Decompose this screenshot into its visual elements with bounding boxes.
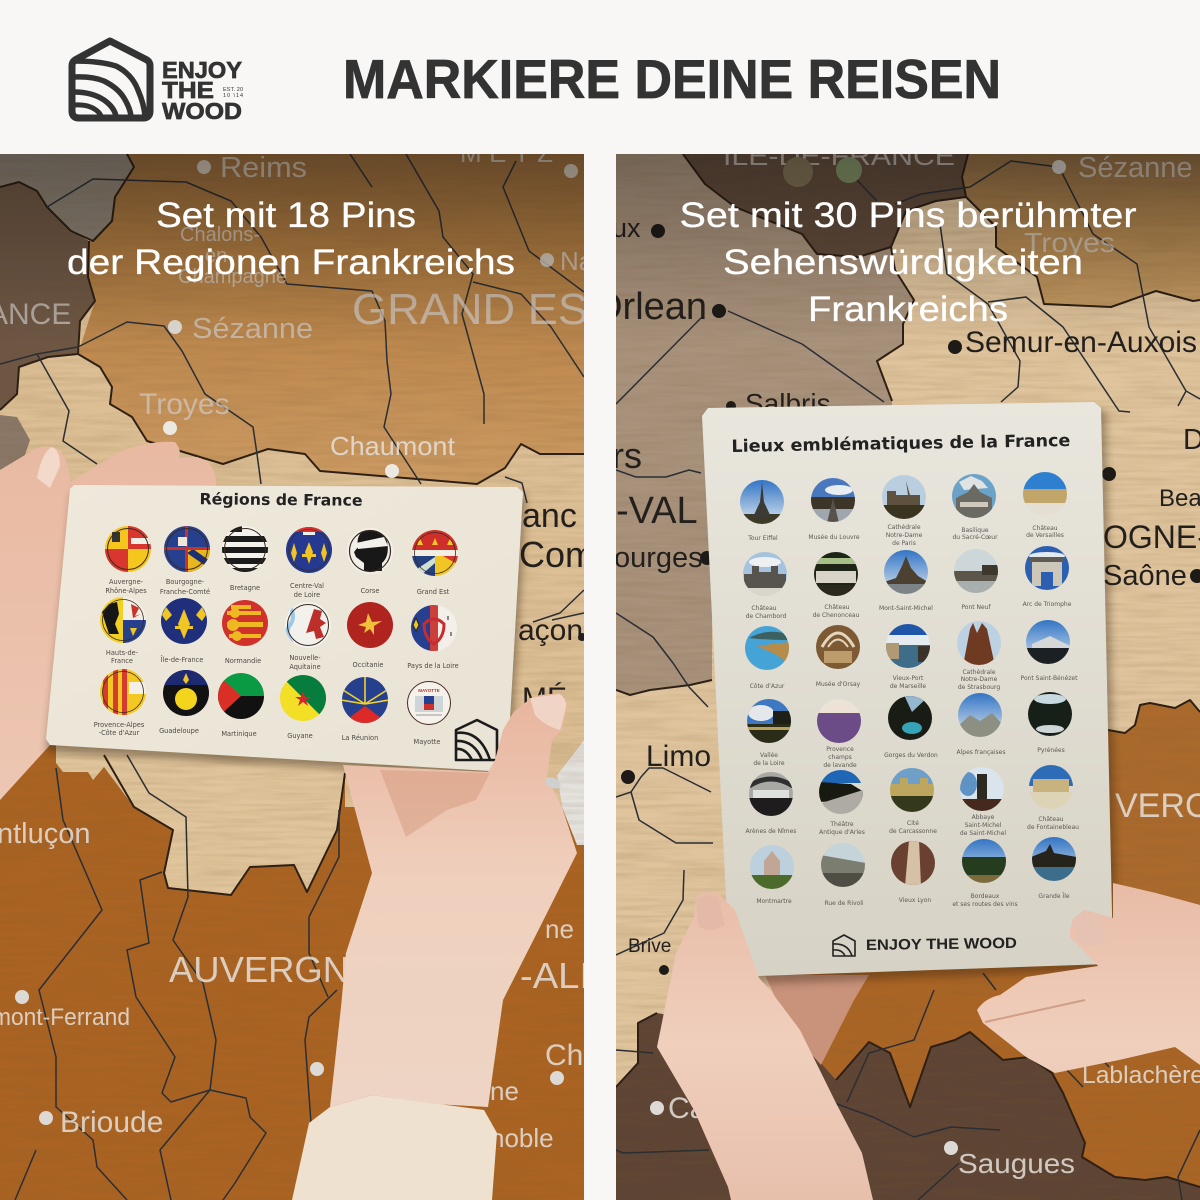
landmark labels: de Chambord [746, 613, 786, 620]
pin: Côte d'Azur [744, 625, 790, 671]
landmark labels: du Sacré-Cœur [952, 534, 998, 541]
map labels: ux [612, 213, 641, 243]
pin: Château de Fontainebleau [1028, 764, 1074, 810]
pin: Auvergne-Rhône-Alpes [105, 526, 151, 572]
map labels: ne [490, 1076, 519, 1106]
region labels: Grand Est [417, 588, 450, 596]
map labels: Troyes [139, 388, 230, 421]
landmark labels: Bordeaux [971, 893, 1000, 900]
map labels: Na [560, 246, 594, 276]
map labels: rs [612, 435, 642, 476]
region labels: Bretagne [230, 584, 260, 592]
landmark pins [739, 471, 1077, 890]
region labels: La Réunion [342, 734, 378, 742]
map labels: Ch [545, 1039, 583, 1072]
region labels: de Loire [294, 591, 320, 599]
pin: Normandie [221, 599, 269, 647]
map labels: Reims [220, 152, 307, 184]
wordmark [162, 57, 243, 124]
pin: Musée d'Orsay [815, 624, 861, 670]
subtitle: landmarks set: Frankreichs [808, 290, 1008, 329]
panel: landmarks set [593, 140, 1200, 1200]
card logo and brand [833, 935, 1017, 956]
landmark labels: Château [1038, 816, 1064, 823]
card: Régions de France [46, 485, 523, 772]
pin: La Réunion [341, 676, 389, 724]
region labels: -Côte d'Azur [99, 729, 140, 737]
panel: regions set [0, 138, 595, 1200]
map labels: -ALI [520, 955, 590, 996]
landmark labels: Provence [826, 746, 854, 753]
landmark labels: Pyrénées [1037, 747, 1065, 754]
pin: Gorges du Verdon [887, 695, 933, 741]
top shading [0, 154, 584, 344]
map labels: açon [518, 614, 583, 647]
landmark labels: Saint-Michel [965, 822, 1002, 829]
pin: Guadeloupe [162, 669, 210, 717]
pin: Provence-Alpes-Côte d'Azur [99, 668, 147, 716]
region labels: Nouvelle- [289, 654, 321, 662]
pin: Mayotte: MAYOTTE [418, 688, 440, 693]
landmark labels: Mont-Saint-Michel [879, 605, 933, 612]
map labels: Brioude [60, 1106, 163, 1139]
pin: Cathédrale Notre-Dame de Paris [881, 474, 927, 520]
hand holding card from left [0, 442, 216, 800]
map labels: noble [490, 1123, 554, 1153]
region labels: Hauts-de- [106, 649, 139, 657]
map labels: Sézanne [1078, 152, 1192, 184]
pin: Mont-Saint-Michel [883, 549, 929, 595]
pin: Abbaye Saint-Michel de Saint-Michel [959, 766, 1005, 812]
title: MARKIERE DEINE REISEN [343, 48, 1001, 110]
map labels [593, 140, 1200, 1179]
pin: Grand Est [411, 529, 459, 577]
pin: Théâtre Antique d'Arles [818, 769, 864, 815]
map labels: Brive [628, 936, 671, 957]
region labels: Normandie [225, 657, 261, 665]
map labels: Champagne [178, 266, 287, 288]
pin: Pont Neuf [953, 548, 999, 594]
region labels: Provence-Alpes [94, 721, 145, 729]
wordmark: WOOD [162, 98, 242, 124]
landmark labels: de Versailles [1026, 532, 1064, 539]
map labels: Ca [668, 1092, 707, 1125]
landmark labels: Alpes françaises [957, 749, 1005, 756]
landmark labels: Notre-Dame [961, 676, 998, 683]
pin: Provence champs de lavande [816, 698, 862, 744]
subtitle: landmarks set: Sehenswürdigkeiten [723, 243, 1083, 282]
map labels: Lablachère [1082, 1062, 1200, 1089]
subtitle: landmarks set [680, 196, 1137, 329]
card title: Régions de France [199, 490, 363, 510]
wordmark: EST. 20 [223, 87, 243, 93]
region labels: Rhône-Alpes [105, 587, 147, 595]
map labels: Sézanne [192, 313, 313, 345]
landmark labels: de Saint-Michel [960, 830, 1006, 837]
region labels: Franche-Comté [160, 588, 210, 596]
map labels: GRAND ES [352, 285, 588, 334]
subtitle: regions set [67, 196, 515, 282]
region labels: Auvergne- [109, 578, 144, 586]
landmark labels: Tour Eiffel [747, 535, 778, 542]
region labels: France [111, 657, 133, 665]
region labels: Centre-Val [290, 582, 324, 590]
pin: Arc de Triomphe [1024, 545, 1070, 591]
region labels: Corse [361, 587, 379, 595]
map labels: Chalons- [180, 224, 260, 246]
pin: Alpes françaises [957, 692, 1003, 738]
landmark labels: Abbaye [972, 814, 995, 821]
map labels: Troyes [1024, 227, 1115, 258]
landmark labels: de Marseille [890, 683, 926, 690]
map labels: en- [205, 245, 234, 267]
landmark labels: Côte d'Azur [750, 683, 785, 690]
landmark labels: Pont Neuf [961, 604, 992, 611]
pin: Île-de-France [160, 597, 208, 645]
region labels: Île-de-France [161, 655, 203, 664]
landmark labels: de Paris [892, 540, 916, 547]
landmark labels: Grande Île [1038, 893, 1070, 900]
pin: Guyane [279, 674, 327, 722]
subtitle: regions set: der Regionen Frankreichs [67, 243, 515, 282]
map background: wood regions [0, 154, 584, 1200]
pin: Martinique [217, 672, 265, 720]
landmark labels: Cathédrale [962, 669, 996, 676]
map labels [0, 138, 595, 1153]
landmark labels: de Chenonceau [813, 612, 860, 619]
map labels: AUVERGN [169, 949, 349, 990]
hand holding card, lower right [977, 883, 1200, 1073]
region labels [94, 578, 459, 746]
pin: Grande Île [1031, 836, 1077, 882]
landmark labels: Vieux Lyon [899, 897, 931, 904]
pin: Cité de Carcassonne [889, 767, 935, 813]
pin: Pyrénées [1027, 691, 1073, 737]
pin: Montmartre [749, 844, 795, 890]
pin: Arènes de Nîmes [748, 771, 794, 817]
pin: Château de Chenonceau [813, 551, 859, 597]
region labels: Occitanie [353, 661, 383, 669]
map labels: MÉ [522, 682, 567, 715]
landmark labels: Arc de Triomphe [1023, 601, 1072, 608]
pin: Bretagne [222, 526, 268, 573]
landmark labels: Château [1032, 525, 1058, 532]
landmark labels [746, 524, 1079, 908]
logo: Enjoy the Wood [72, 41, 243, 124]
landmark labels: Rue de Rivoli [824, 900, 864, 907]
map labels: Semur-en-Auxois [965, 326, 1197, 359]
landmark labels: et ses routes des vins [952, 901, 1018, 908]
pin: Château de Versailles [1023, 472, 1067, 503]
hand holding card from right [292, 693, 577, 1200]
landmark labels: de Strasbourg [958, 684, 1000, 691]
pin: Rue de Rivoli [820, 842, 866, 888]
landmark labels: Vallée [760, 752, 778, 759]
map labels: Saône [1103, 560, 1187, 592]
pin: Bordeaux et ses routes des vins [961, 838, 1007, 884]
map labels: Saugues [958, 1148, 1075, 1179]
map labels: Limo [646, 740, 711, 773]
region labels: Pays de la Loire [407, 662, 459, 670]
icon: wooden house [72, 41, 150, 118]
shadow: landmarks card [708, 410, 1118, 985]
pin: Château de Chambord [742, 551, 788, 597]
card: Lieux emblématiques de la France [702, 402, 1113, 977]
landmark labels: Antique d'Arles [819, 829, 865, 836]
region labels: Mayotte [414, 738, 440, 746]
pin: Nouvelle-Aquitaine [284, 601, 332, 649]
pin: Pays de la Loire [410, 604, 458, 652]
landmark labels: de lavande [823, 762, 857, 769]
landmark labels: Notre-Dame [886, 532, 923, 539]
map labels: ÎLE-DE-FRANCE [722, 140, 955, 171]
pin: Vieux-Port de Marseille [885, 623, 931, 669]
top shading [616, 154, 1200, 344]
brand text: ENJOY THE WOOD [866, 935, 1017, 954]
subtitle: regions set: Set mit 18 Pins [156, 196, 416, 235]
landmark labels: Musée d'Orsay [816, 681, 861, 688]
wordmark: THE [162, 77, 214, 103]
landmark labels: Gorges du Verdon [884, 752, 938, 759]
pin: Vallée de la Loire [746, 698, 792, 744]
landmark labels: Vieux-Port [893, 675, 924, 682]
landmark labels: Montmartre [756, 898, 792, 905]
landmark labels: de la Loire [753, 760, 785, 767]
pin: Occitanie [346, 601, 394, 649]
landmark labels: Musée du Louvre [808, 534, 860, 541]
landmark labels: Théâtre [829, 821, 854, 828]
pin: Mayotte [408, 682, 450, 724]
pin: Basilique du Sacré-Cœur [951, 473, 997, 519]
landmark labels: champs [828, 754, 852, 761]
map labels: ourges [614, 542, 703, 574]
wordmark: 10 \14 [223, 93, 243, 99]
map background: wood regions [616, 154, 1200, 1200]
landmark labels: de Carcassonne [889, 828, 937, 835]
map labels: anc [522, 497, 577, 535]
card title: Lieux emblématiques de la France [731, 431, 1071, 457]
map labels: Orlean [593, 286, 707, 328]
region labels: Aquitaine [289, 663, 321, 671]
region labels: Guadeloupe [159, 727, 199, 735]
map labels: Chaumont [330, 431, 456, 461]
fingers behind card [765, 975, 869, 1065]
map labels: -VAL [616, 490, 698, 532]
pin: Bourgogne-Franche-Comté [164, 526, 210, 572]
pin: Hauts-de-France [99, 596, 147, 644]
pin: Corse [347, 528, 393, 574]
landmark labels: Château [751, 605, 777, 612]
pin: Centre-Val de Loire [285, 526, 333, 574]
icon: small house [833, 935, 855, 956]
map labels: ne [545, 914, 574, 944]
pin: Tour Eiffel [739, 479, 785, 525]
landmark labels: Château [824, 604, 850, 611]
region labels: Bourgogne- [166, 578, 205, 586]
map labels: METZ [460, 138, 553, 168]
landmark labels: Arènes de Nîmes [746, 828, 796, 835]
map labels: Com [519, 534, 595, 575]
subtitle: landmarks set: Set mit 30 Pins berühmter [680, 196, 1137, 235]
pin: Cathédrale Notre-Dame de Strasbourg [956, 620, 1002, 666]
region labels: Martinique [221, 730, 257, 738]
landmark labels: Basilique [961, 527, 989, 534]
pin: Vieux Lyon [890, 840, 936, 886]
region pins [99, 526, 459, 724]
map labels: Salbris [745, 388, 831, 419]
region labels: Guyane [287, 732, 313, 740]
hand holding card, lower left [657, 892, 873, 1200]
pin: Pont Saint-Bénézet [1025, 619, 1071, 665]
pin: Musée du Louvre [810, 477, 856, 523]
landmark labels: de Fontainebleau [1027, 824, 1079, 831]
landmark labels: Pont Saint-Bénézet [1021, 675, 1078, 682]
landmark labels: Cité [907, 820, 919, 827]
shadow: regions card [46, 492, 526, 778]
wordmark: ENJOY [162, 57, 242, 83]
landmark labels: Cathédrale [887, 524, 921, 531]
icon: card logo [456, 720, 497, 760]
